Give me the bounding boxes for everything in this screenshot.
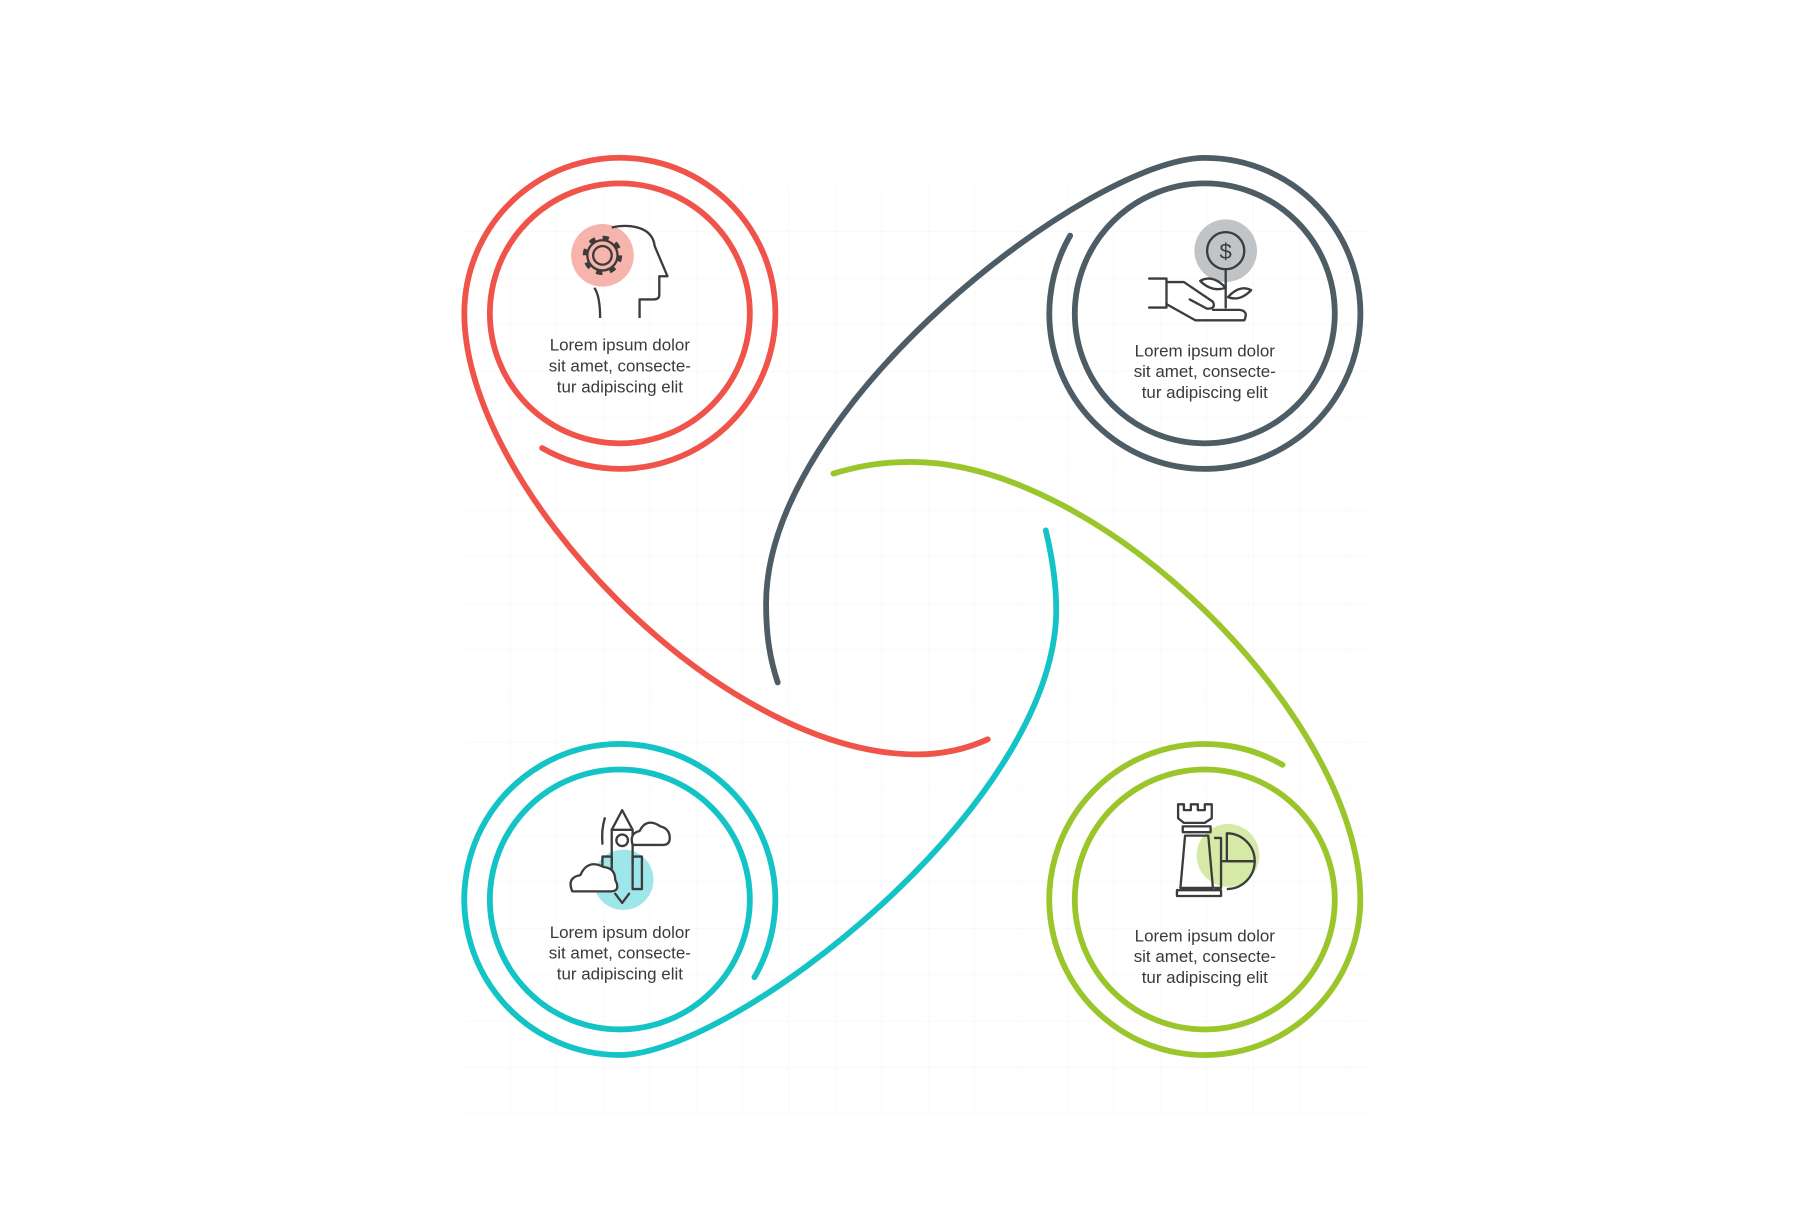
text: green: sit amet, consecte- <box>1134 947 1276 966</box>
text: dark <box>1134 341 1276 402</box>
text: red: tur adipiscing elit <box>557 377 683 396</box>
icon: hand with money plant: $ <box>1220 239 1232 264</box>
icon: rocket with clouds <box>571 810 670 910</box>
text: teal: sit amet, consecte- <box>549 944 691 963</box>
panel: red spiral <box>464 158 988 754</box>
text: green <box>1134 926 1276 987</box>
text: dark: sit amet, consecte- <box>1134 362 1276 381</box>
text: dark: Lorem ipsum dolor <box>1135 341 1275 360</box>
text: red: sit amet, consecte- <box>549 356 691 375</box>
panel: dark spiral <box>766 158 1360 682</box>
icon: hand with money plant <box>1149 219 1257 320</box>
text: green: tur adipiscing elit <box>1142 968 1268 987</box>
icon: head with gear <box>571 224 667 318</box>
text: green: Lorem ipsum dolor <box>1135 926 1275 945</box>
panel: teal spiral <box>464 530 1056 1055</box>
text: teal: tur adipiscing elit <box>557 965 683 984</box>
text: teal: Lorem ipsum dolor <box>550 923 690 942</box>
text: teal <box>549 923 691 984</box>
panel: green spiral <box>833 462 1360 1055</box>
icon: rook with pie chart <box>1177 804 1259 896</box>
text: red: Lorem ipsum dolor <box>550 336 690 355</box>
text: red <box>549 336 691 396</box>
text: dark: tur adipiscing elit <box>1142 383 1268 402</box>
